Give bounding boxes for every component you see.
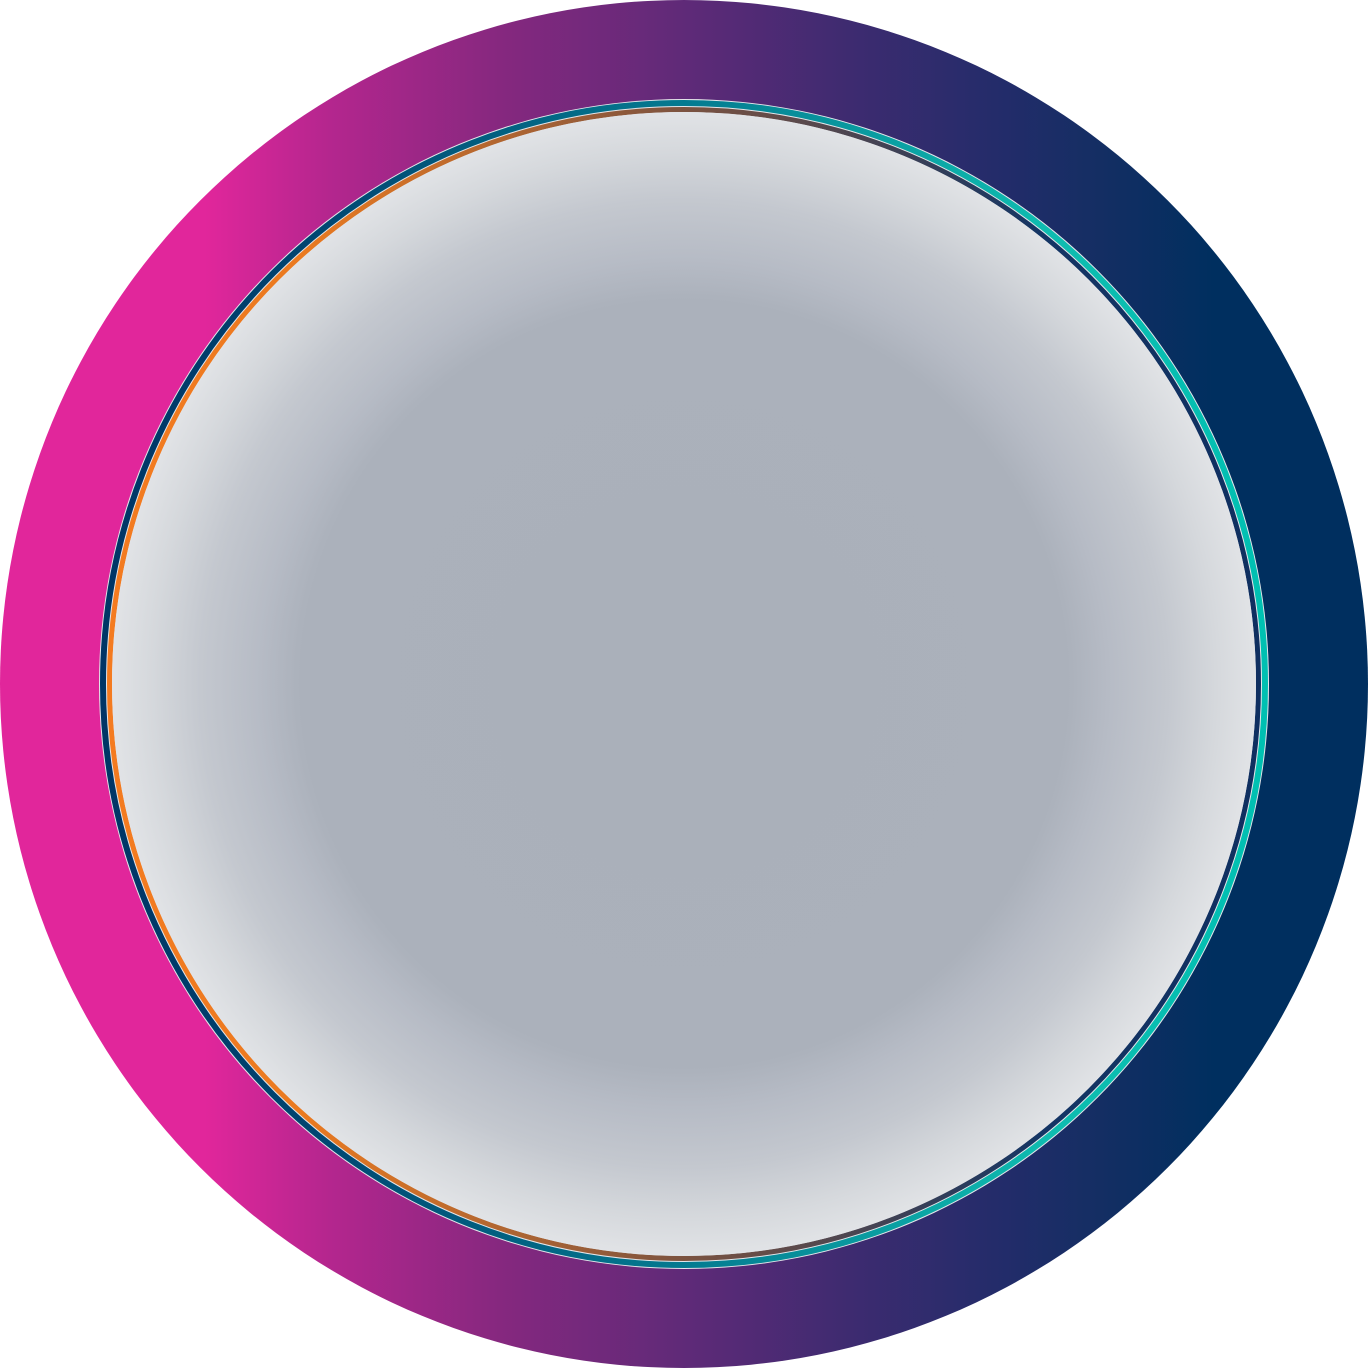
ring: orange to navy — [110, 110, 1258, 1258]
inner radial disc — [112, 112, 1256, 1256]
outer hairline — [99, 99, 1269, 1269]
ring: navy to teal — [103, 103, 1265, 1265]
